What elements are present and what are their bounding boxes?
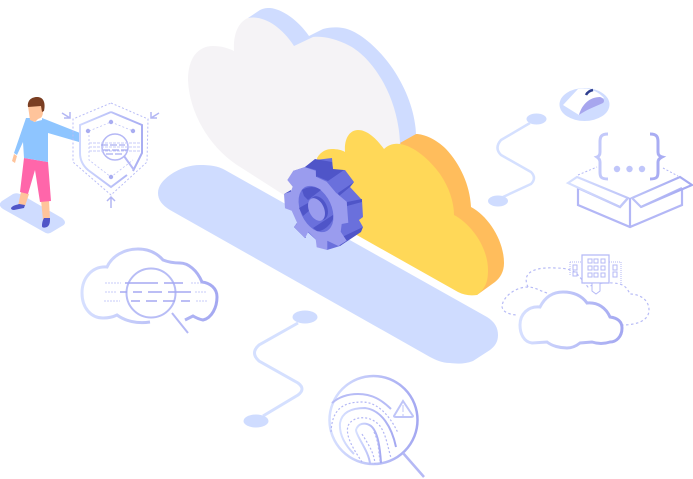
gear face (284, 167, 348, 250)
back cloud side (248, 8, 416, 146)
head (28, 106, 43, 122)
platform under person (0, 193, 65, 234)
figure: person pointing at shield (0, 97, 80, 234)
yellow cloud (317, 130, 504, 295)
connector: top right (488, 114, 546, 206)
icon: cloud with magnifier (82, 249, 217, 333)
arrows (62, 112, 159, 208)
icon: cloud with building (502, 255, 649, 348)
gear side shadows (284, 159, 363, 246)
collar (31, 116, 42, 122)
gear hole (292, 180, 340, 238)
sweater (14, 118, 80, 162)
box body (578, 188, 682, 227)
gear hub (305, 193, 332, 224)
icon: fingerprint under magnifier (330, 376, 424, 477)
hand (12, 154, 17, 163)
hair (28, 97, 45, 112)
gear hole shadows (299, 187, 333, 231)
yellow cloud face (317, 130, 488, 295)
trousers (20, 158, 51, 202)
braces (597, 134, 608, 179)
dotted cloud (502, 268, 649, 325)
back cloud (188, 8, 416, 230)
solid cloud (520, 292, 622, 348)
yellow cloud side (400, 134, 504, 295)
connector: bottom centre (244, 310, 318, 428)
box flaps (568, 177, 692, 207)
back cloud face (188, 18, 400, 230)
warning triangle (394, 401, 413, 417)
gear side (293, 158, 363, 250)
legs (18, 192, 50, 220)
fingerprint ridges (332, 394, 391, 409)
icon: mouse badge (560, 88, 610, 121)
building (570, 255, 621, 294)
icon: open box with braces (568, 134, 692, 227)
gear (284, 158, 363, 250)
shoes (11, 204, 50, 228)
icon: shield with magnifier (62, 103, 159, 208)
base platform (158, 165, 498, 364)
